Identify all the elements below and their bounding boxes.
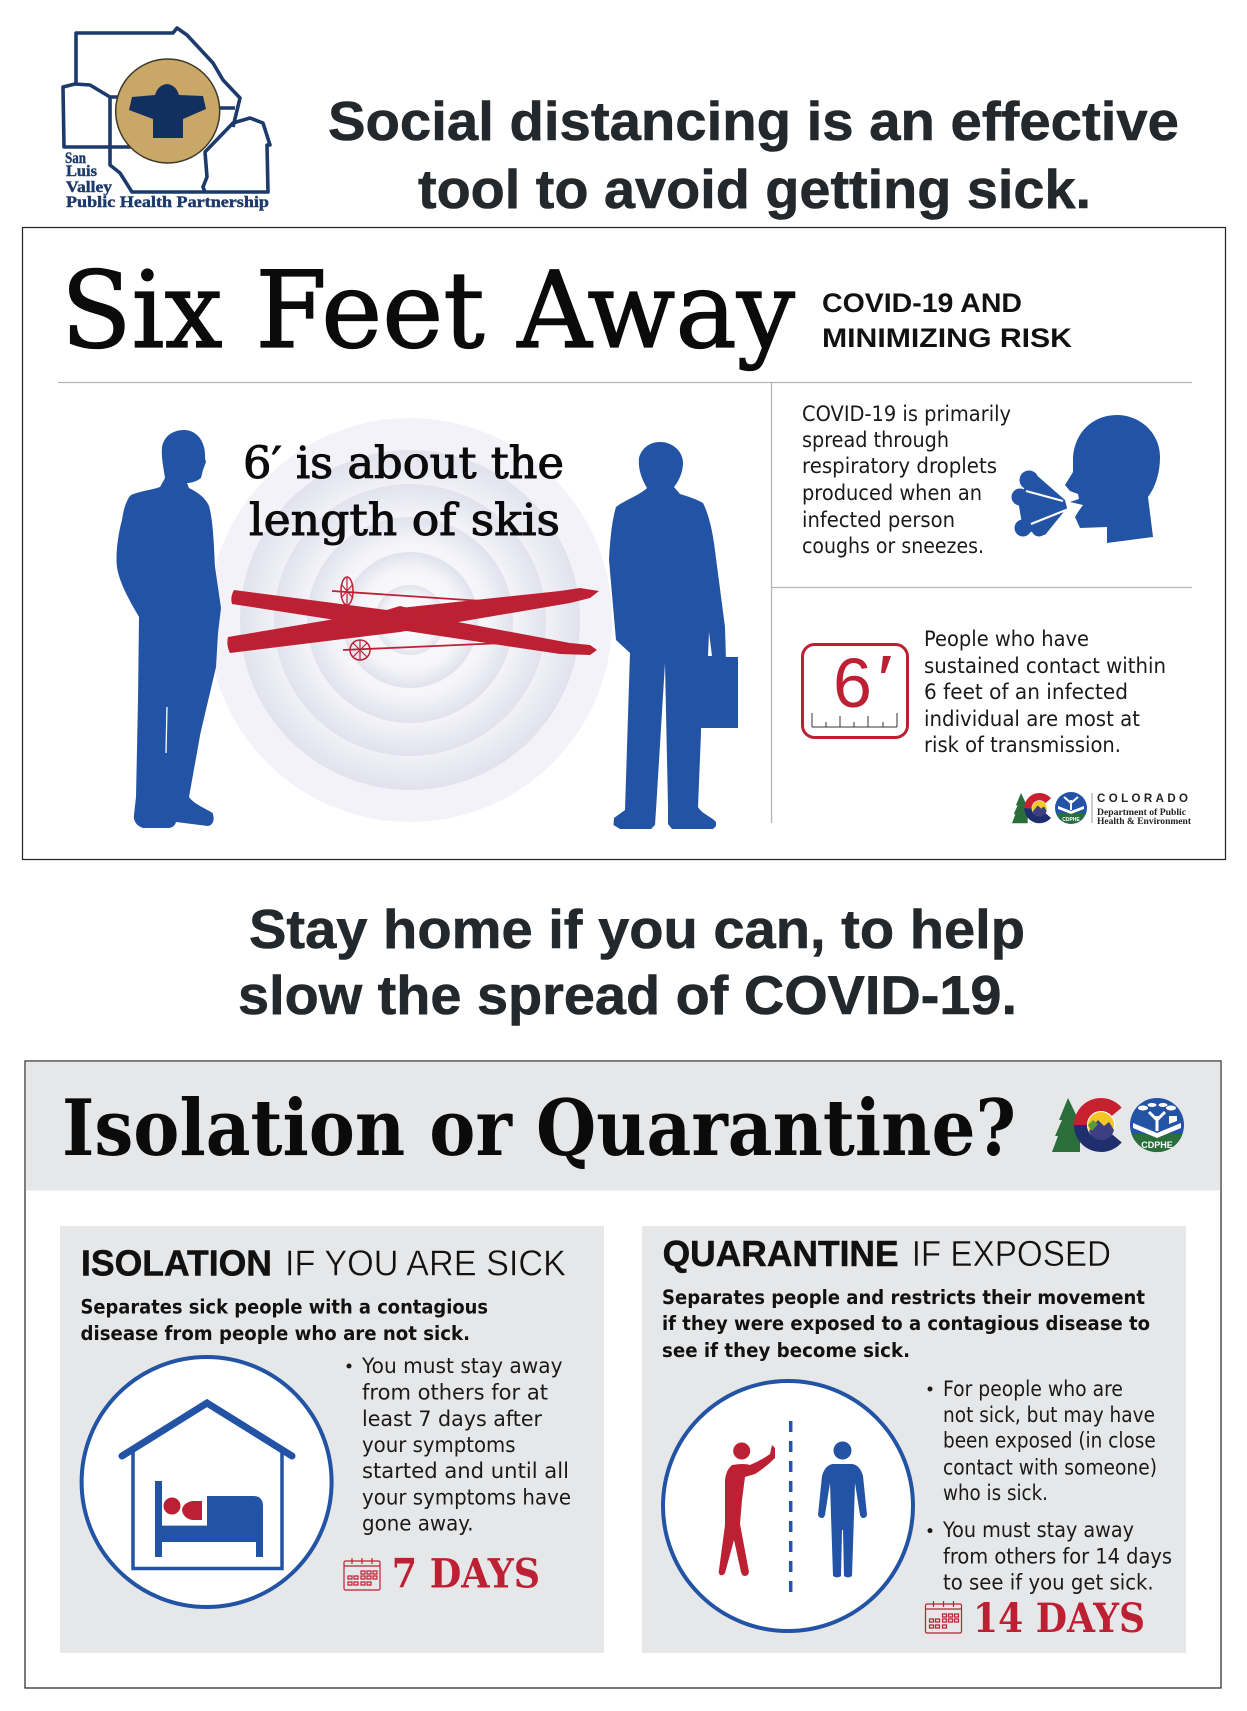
text: risk of transmission: People who have xyxy=(924,627,1089,651)
logo: San Luis Valley Public Health Partnership: San xyxy=(65,150,86,167)
callout: 7 days: 7 DAYS xyxy=(392,1550,540,1598)
text: quarantine guidance: been exposed (in close xyxy=(943,1428,1156,1452)
text: how COVID-19 spreads: coughs or sneezes. xyxy=(802,534,984,558)
text: how COVID-19 spreads: produced when an xyxy=(802,481,982,505)
heading: quarantine if exposed: IF EXPOSED xyxy=(912,1233,1111,1274)
illustration: right person silhouette with briefcase xyxy=(609,442,738,829)
text: isolation guidance: from others for at xyxy=(362,1380,548,1404)
text: isolation guidance: your symptoms xyxy=(362,1433,516,1457)
text: quarantine guidance: who is sick. xyxy=(943,1481,1048,1505)
callout: 6 feet is about the length of skis xyxy=(243,438,564,546)
text: quarantine guidance: contact with someone) xyxy=(943,1456,1157,1480)
heading: stay home: slow the spread of COVID-19. xyxy=(238,964,1017,1026)
definition: isolation: Separates sick people with a contagious xyxy=(80,1296,488,1318)
text: risk of transmission: 6 feet of an infected xyxy=(924,680,1128,704)
text: risk of transmission: risk of transmission. xyxy=(924,733,1121,757)
subtitle: COVID-19 and minimizing risk: COVID-19 AND xyxy=(822,288,1022,318)
title: Isolation or Quarantine?: Isolation or Quarantine? xyxy=(62,1083,1016,1174)
text: quarantine guidance xyxy=(928,1377,1172,1595)
logo: Colorado Department of Public Health and Environment: Department of Public xyxy=(1097,808,1186,818)
header band xyxy=(26,1062,1220,1190)
logo: CDPHE seal: CDPHE xyxy=(1141,1140,1173,1150)
text: quarantine guidance: to see if you get sick. xyxy=(943,1571,1154,1595)
text: quarantine guidance: not sick, but may have xyxy=(943,1403,1155,1427)
panel: quarantine xyxy=(642,1226,1186,1653)
illustration: left person silhouette xyxy=(117,430,221,828)
heading: social distancing: tool to avoid getting sick. xyxy=(418,158,1091,220)
text: quarantine guidance: You must stay away xyxy=(942,1518,1134,1542)
heading: isolation if you are sick xyxy=(81,1242,566,1284)
definition: quarantine: Separates people and restricts their movement xyxy=(662,1286,1145,1309)
panel: isolation or quarantine xyxy=(25,1061,1221,1688)
definition: isolation xyxy=(80,1296,488,1345)
text: risk of transmission: sustained contact within xyxy=(924,654,1166,678)
subtitle: COVID-19 and minimizing risk xyxy=(822,288,1072,353)
logo: Colorado C xyxy=(1052,1098,1117,1152)
definition: quarantine: see if they become sick. xyxy=(662,1339,910,1362)
logo: CDPHE seal xyxy=(1130,1098,1184,1152)
illustration: concentric distance rings xyxy=(208,418,612,822)
heading: isolation if you are sick: IF YOU ARE SICK xyxy=(285,1242,566,1284)
text: isolation guidance: your symptoms have xyxy=(362,1486,571,1510)
subtitle: COVID-19 and minimizing risk: MINIMIZING RISK xyxy=(822,323,1072,353)
heading: social distancing: Social distancing is an effective xyxy=(328,90,1179,152)
text: risk of transmission: individual are most at xyxy=(924,707,1140,731)
logo: Colorado Department of Public Health and Environment: CDPHE xyxy=(1062,817,1080,823)
logo: Colorado Department of Public Health and Environment: Health & Environment xyxy=(1097,817,1192,827)
definition: quarantine xyxy=(662,1286,1150,1362)
text: risk of transmission xyxy=(924,627,1166,757)
text: quarantine guidance: from others for 14 days xyxy=(943,1544,1172,1568)
text: isolation guidance: gone away. xyxy=(362,1512,474,1536)
text: isolation guidance: You must stay away xyxy=(361,1354,562,1378)
text: how COVID-19 spreads: respiratory droplets xyxy=(802,454,997,478)
text: how COVID-19 spreads: COVID-19 is primarily xyxy=(802,402,1011,426)
text: isolation guidance xyxy=(346,1354,571,1536)
icon: six foot ruler xyxy=(802,644,908,738)
heading: quarantine if exposed xyxy=(663,1233,1111,1274)
icon: person in bed inside house xyxy=(82,1357,332,1607)
heading: social distancing xyxy=(328,90,1179,220)
text: isolation guidance: started and until all xyxy=(362,1459,569,1483)
definition: isolation: disease from people who are not sick. xyxy=(80,1322,470,1345)
logo: San Luis Valley Public Health Partnership: Public Health Partnership xyxy=(66,194,269,211)
heading: isolation if you are sick: ISOLATION xyxy=(81,1242,272,1284)
heading: stay home xyxy=(238,898,1025,1026)
callout: 6 feet is about the length of skis: length of skis xyxy=(249,495,560,546)
title: Six Feet Away: Six Feet Away xyxy=(61,249,795,372)
icon: six foot ruler: 6 xyxy=(833,644,872,722)
logo: Colorado Department of Public Health and Environment xyxy=(1012,792,1192,827)
callout: 14 days: 14 DAYS xyxy=(973,1595,1145,1642)
text: how COVID-19 spreads: spread through xyxy=(802,428,949,452)
definition: quarantine: if they were exposed to a contagious disease to xyxy=(662,1312,1150,1335)
logo: Colorado Department of Public Health and Environment: COLORADO xyxy=(1097,793,1188,805)
heading: quarantine if exposed: QUARANTINE xyxy=(663,1233,899,1274)
text: quarantine guidance: For people who are xyxy=(943,1377,1123,1401)
panel: isolation xyxy=(60,1226,604,1653)
logo: San Luis Valley Public Health Partnership xyxy=(63,28,270,211)
icon: two people separated by dashed line xyxy=(663,1381,913,1631)
logo: San Luis Valley Public Health Partnership: Valley xyxy=(66,179,112,196)
icon: head coughing droplets xyxy=(1012,415,1160,543)
panel: six feet away xyxy=(22,228,1226,860)
text: how COVID-19 spreads: infected person xyxy=(802,508,955,532)
illustration: crossed red skis and poles xyxy=(227,577,599,660)
heading: stay home: Stay home if you can, to help xyxy=(249,898,1025,960)
text: isolation guidance: least 7 days after xyxy=(362,1407,542,1431)
text: how COVID-19 spreads xyxy=(802,402,1011,558)
logo: San Luis Valley Public Health Partnership: Luis xyxy=(66,163,97,180)
callout: 6 feet is about the length of skis: 6′ is about the xyxy=(243,438,564,489)
